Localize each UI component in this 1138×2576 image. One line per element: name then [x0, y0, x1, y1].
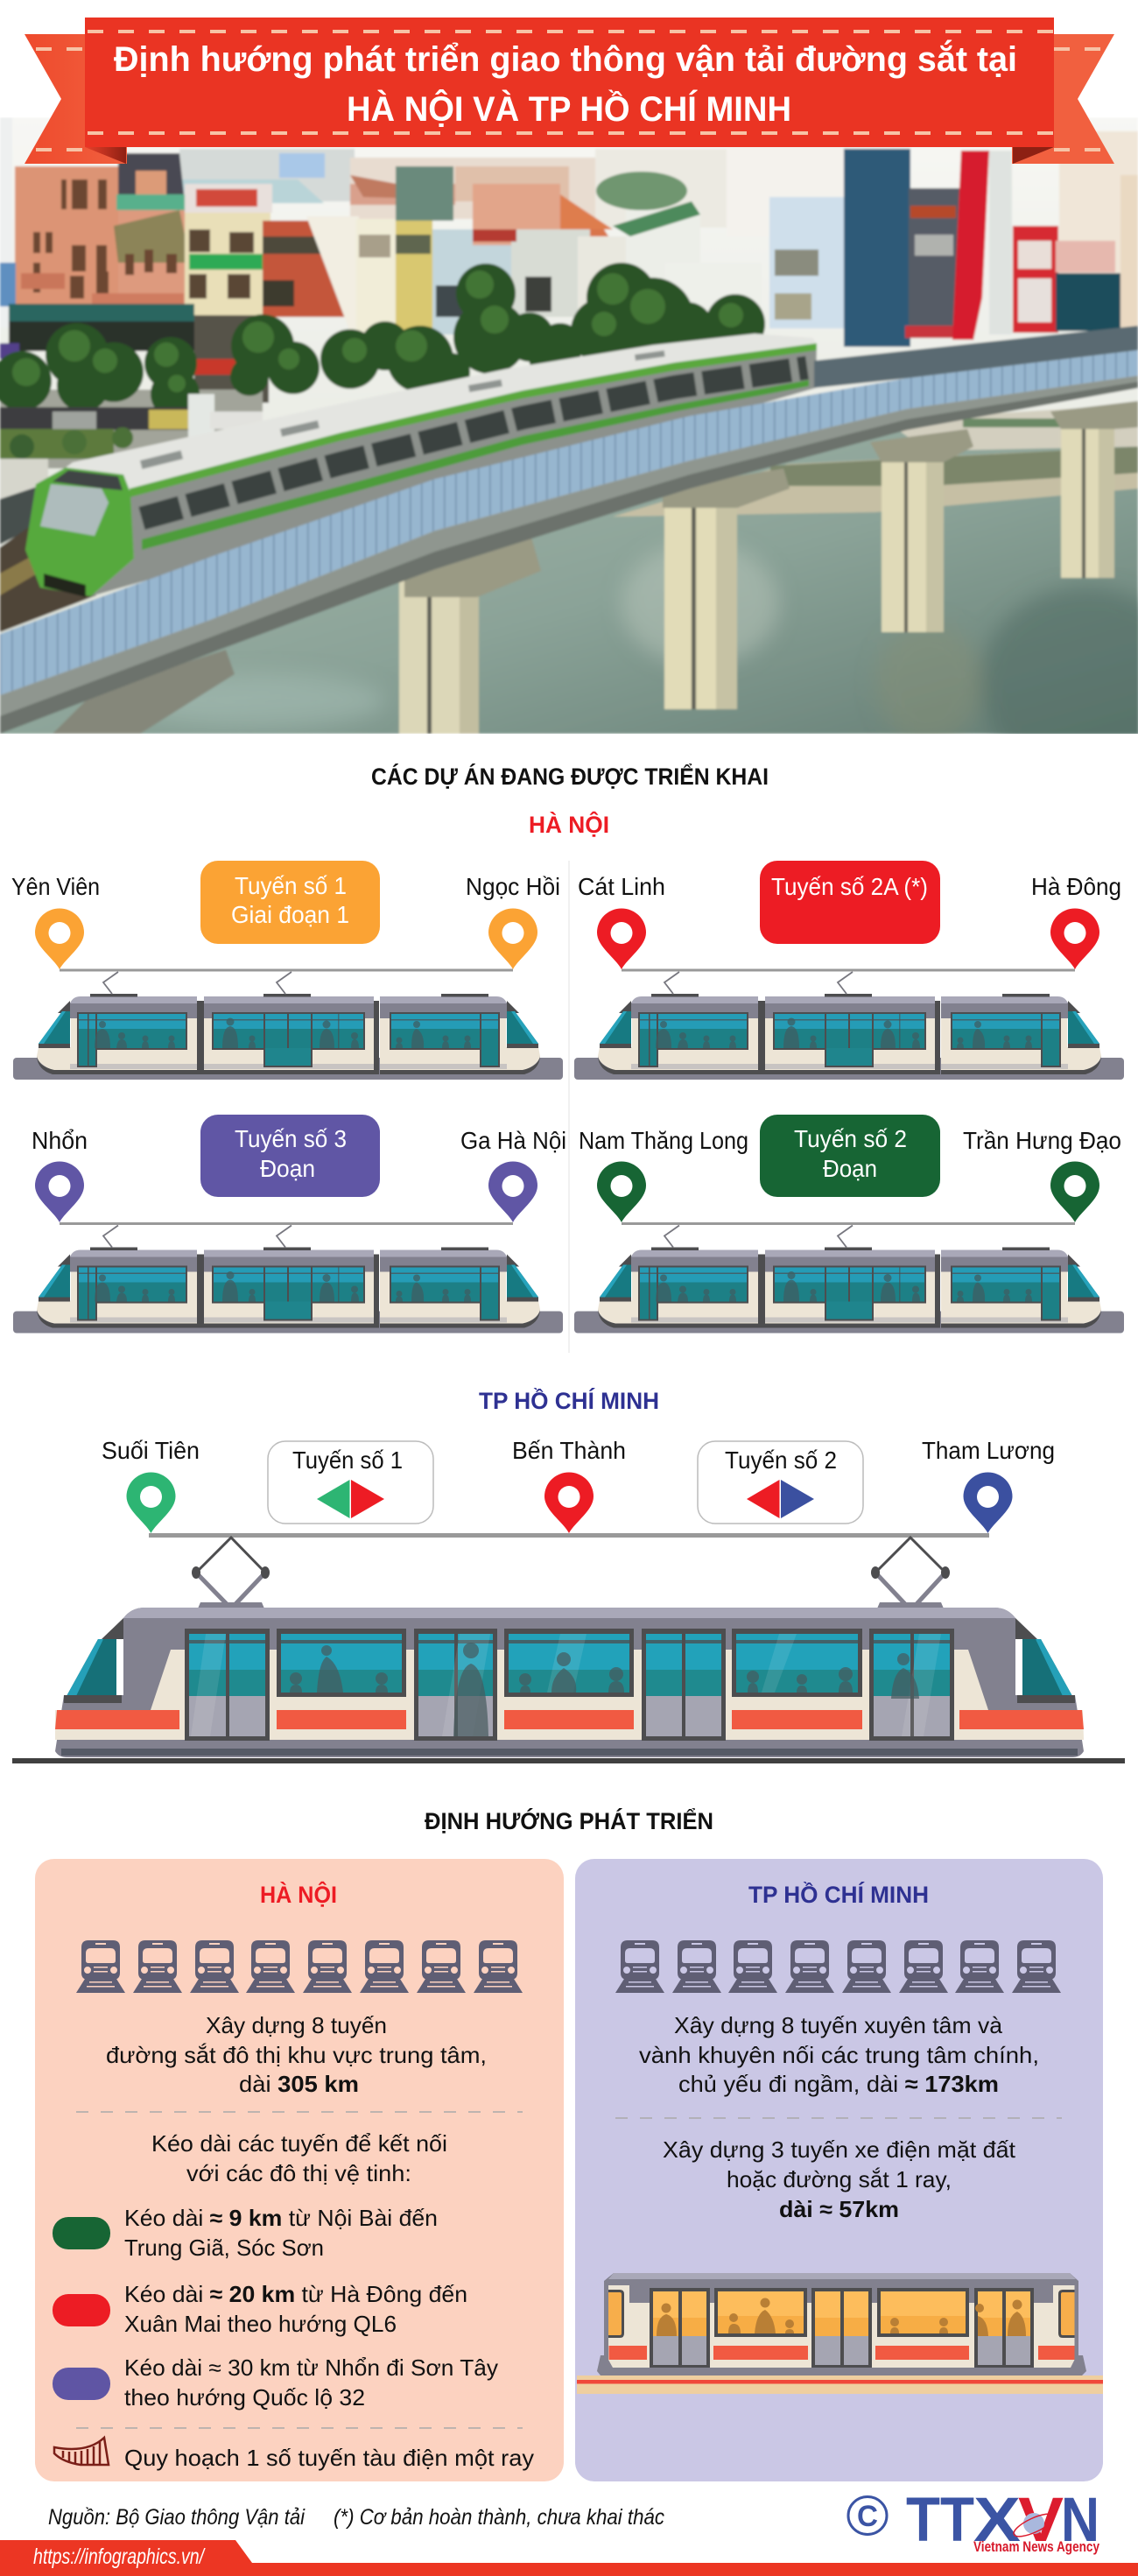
panel: Ho Chi Minh lines route [12, 1437, 1125, 1763]
logo: TTXVN: N [1061, 2486, 1099, 2555]
logo: TTXVN: X [973, 2486, 1021, 2555]
text: 3 surface lines: hoặc đường sắt 1 ray, [727, 2166, 952, 2192]
ribbon tails [25, 34, 1114, 164]
icons: 8 trains [76, 1940, 523, 1993]
legend: purple line [53, 2354, 498, 2411]
panel: line 2 Nam Thăng Long - Trần Hưng Đạo [574, 1115, 1124, 1333]
legend: green line: Kéo dài ≈ 9 km từ Nội Bài đến [124, 2205, 438, 2231]
station labels: Ngọc Hồi [466, 873, 560, 900]
legend: purple line: theo hướng Quốc lộ 32 [124, 2384, 365, 2411]
logo: TTXVN: V [1018, 2486, 1064, 2555]
wire [149, 1533, 989, 1538]
text: 8 central lines [106, 2012, 487, 2097]
heading: Ho Chi Minh City: TP HỒ CHÍ MINH [479, 1387, 659, 1414]
line label: Giai đoạn 1 [231, 901, 349, 928]
line label: Tuyến số 2A (*) [771, 873, 928, 900]
panel: line 2A Cát Linh - Hà Đông [574, 861, 1124, 1080]
text: 8 lines [639, 2012, 1039, 2097]
station labels: Trần Hưng Đạo [963, 1127, 1121, 1154]
station pins [126, 1473, 1012, 1533]
big tram [55, 1608, 1084, 1757]
text: 8 central lines: dài 305 km [239, 2071, 359, 2097]
logo: TTXVN [848, 2486, 1099, 2555]
line label [760, 861, 940, 944]
panel: line 3 Nhổn - Ga Hà Nội [13, 1115, 566, 1333]
station labels [11, 873, 560, 900]
panel: Ho Chi Minh development [575, 1859, 1103, 2481]
text: 8 lines: chủ yếu đi ngầm, dài ≈ 173km [678, 2071, 999, 2097]
station labels [578, 873, 1121, 900]
station labels: Bến Thành [512, 1437, 626, 1464]
footer bar with URL [0, 2540, 1138, 2576]
icons: 8 trains [615, 1940, 1061, 1993]
panel: Hanoi development [35, 1859, 564, 2481]
hero photo: elevated metro train on viaduct [0, 117, 1138, 779]
passengers [290, 1643, 919, 1736]
text: satellite connections [151, 2130, 447, 2186]
heading: current projects: CÁC DỰ ÁN ĐANG ĐƯỢC TRIỂN KHAI [371, 763, 769, 790]
source note: Nguồn: Bộ Giao thông Vận tải [48, 2505, 306, 2530]
pantographs [192, 1538, 950, 1608]
legend: red line: Xuân Mai theo hướng QL6 [124, 2311, 397, 2337]
station labels: Yên Viên [11, 873, 100, 900]
text: satellite connections: Kéo dài các tuyến để kết nối [151, 2130, 447, 2157]
title text [114, 39, 1017, 129]
station labels: Suối Tiên [102, 1437, 200, 1464]
station labels: Cát Linh [578, 873, 665, 900]
panel heading: HÀ NỘI [260, 1881, 337, 1908]
text: 3 surface lines [663, 2136, 1016, 2222]
panel divider [568, 861, 570, 1353]
text: monorail plan: Quy hoạch 1 số tuyến tàu điện một ray [124, 2445, 534, 2471]
heading: Hanoi: HÀ NỘI [529, 811, 609, 838]
tram [574, 1226, 1124, 1333]
text: 8 central lines: đường sắt đô thị khu vực trung tâm, [106, 2042, 487, 2068]
line label: Đoạn [260, 1155, 315, 1182]
line label: Tuyến số 3 [235, 1125, 347, 1152]
station labels: Nhổn [32, 1127, 88, 1154]
line 1 key [268, 1441, 433, 1524]
station labels [579, 1127, 1121, 1154]
title text: HÀ NỘI VÀ TP HỒ CHÍ MINH [347, 88, 791, 129]
line label [200, 1115, 380, 1197]
text: 3 surface lines: Xây dựng 3 tuyến xe điện mặt đất [663, 2136, 1016, 2163]
tram [13, 1226, 563, 1333]
station labels: Ga Hà Nội [460, 1127, 566, 1154]
station labels: Nam Thăng Long [579, 1127, 748, 1154]
station pins [35, 909, 537, 969]
station labels: Hà Đông [1031, 873, 1121, 900]
station pins [597, 1161, 1099, 1222]
line label [200, 861, 380, 944]
orange tram [577, 2273, 1103, 2394]
legend: purple line: Kéo dài ≈ 30 km từ Nhổn đi Sơn Tây [124, 2354, 498, 2381]
line 1 key: Tuyến số 1 [292, 1446, 403, 1474]
legend: green line: Trung Giã, Sóc Sơn [124, 2235, 324, 2261]
doors and windows [185, 1629, 954, 1741]
station labels [102, 1437, 1055, 1464]
station pins [35, 1161, 537, 1222]
legend: red line: Kéo dài ≈ 20 km từ Hà Đông đến [124, 2281, 467, 2307]
track [12, 1758, 1125, 1763]
logo: TTXVN: C [857, 2500, 878, 2533]
title text: Định hướng phát triển giao thông vận tải đường sắt tại [114, 39, 1017, 79]
text: 8 lines: vành khuyên nối các trung tâm chính, [639, 2042, 1039, 2068]
line label: Đoạn [823, 1155, 877, 1182]
legend: green line [53, 2205, 438, 2261]
tram [574, 972, 1124, 1080]
line label [760, 1115, 940, 1197]
text: 3 surface lines: dài ≈ 57km [779, 2196, 899, 2222]
footnote: (*) Cơ bản hoàn thành, chưa khai thác [334, 2505, 664, 2530]
station labels [32, 1127, 566, 1154]
icon: monorail track [54, 2438, 109, 2465]
station labels: Tham Lương [922, 1437, 1055, 1464]
footer bar with URL: https://infographics.vn/ [33, 2544, 206, 2569]
legend: red line [53, 2281, 467, 2337]
tram [13, 972, 563, 1080]
panel: line 1 Yên Viên - Ngọc Hồi [11, 861, 563, 1080]
station pins [597, 909, 1099, 969]
logo: TTXVN: TT [906, 2486, 974, 2555]
text: 8 lines: Xây dựng 8 tuyến xuyên tâm và [674, 2012, 1003, 2038]
line 2 key: Tuyến số 2 [725, 1446, 837, 1474]
line label: Tuyến số 2 [794, 1125, 907, 1152]
text: 8 central lines: Xây dựng 8 tuyến [206, 2012, 387, 2038]
heading: development orientation: ĐỊNH HƯỚNG PHÁT TRIỂN [425, 1807, 713, 1834]
title banner ribbon [25, 18, 1114, 164]
text: satellite connections: với các đô thị vệ tinh: [186, 2160, 411, 2186]
line 2 key [698, 1441, 863, 1524]
panel heading: TP HỒ CHÍ MINH [748, 1881, 929, 1908]
logo: TTXVN: Vietnam News Agency [973, 2538, 1099, 2555]
line label: Tuyến số 1 [235, 872, 347, 899]
